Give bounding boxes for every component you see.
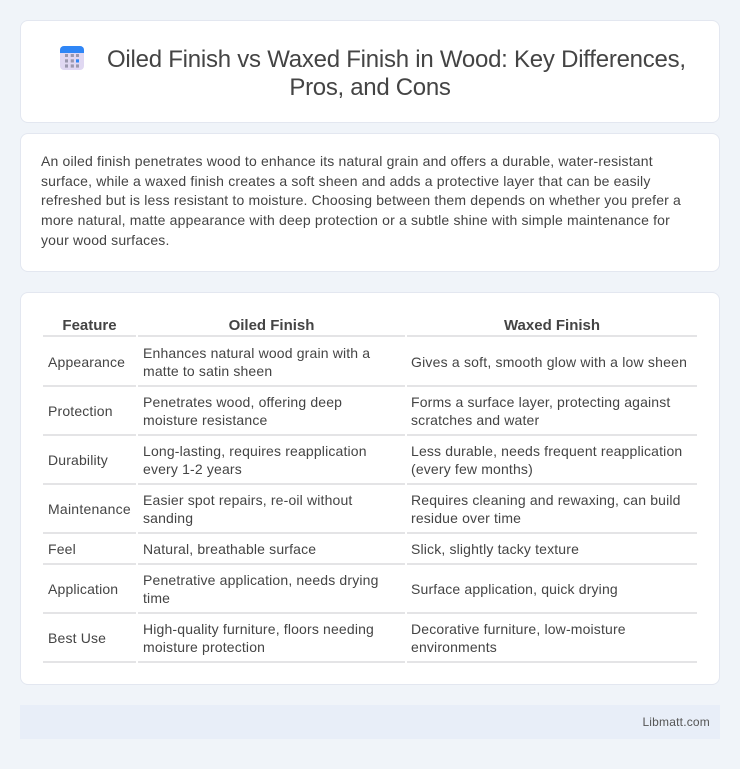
text block: introduction: surface, while a waxed finish creates a soft sheen and adds a protective layer that can be easily	[41, 173, 650, 189]
table header: Feature	[62, 317, 117, 334]
row: protection	[43, 394, 697, 436]
panel: comparison table	[20, 292, 720, 685]
row: protection: Protection	[48, 403, 113, 419]
row: durability: (every few months)	[411, 461, 533, 477]
row: feel: Natural, breathable surface	[143, 541, 316, 557]
row: durability: Less durable, needs frequent reapplication	[411, 443, 682, 459]
row: appearance: Appearance	[48, 354, 125, 370]
row: appearance: matte to satin sheen	[143, 363, 272, 379]
table header	[43, 317, 697, 337]
row: maintenance: Requires cleaning and rewaxing, can build	[411, 492, 681, 508]
row: application: Application	[48, 581, 118, 597]
row: application: Penetrative application, needs drying	[143, 572, 379, 588]
row: best use: Decorative furniture, low-moisture	[411, 621, 626, 637]
row: appearance: Gives a soft, smooth glow with a low sheen	[411, 354, 687, 370]
row: best use: moisture protection	[143, 639, 265, 655]
row: application: Surface application, quick drying	[411, 581, 618, 597]
row: maintenance: residue over time	[411, 510, 521, 526]
row: application	[43, 572, 697, 614]
panel: introduction	[20, 133, 720, 272]
row: appearance	[43, 345, 697, 387]
row: feel	[43, 541, 697, 565]
row: appearance: Enhances natural wood grain with a	[143, 345, 370, 361]
panel: header	[20, 20, 720, 123]
text block: introduction: refreshed but is less resistant to moisture. Choosing between them depends on whether you prefer a	[41, 192, 681, 208]
table header: Oiled Finish	[229, 317, 314, 334]
text block: introduction: more natural, matte appearance with deep protection or a subtle shine with simple maintenance for	[41, 212, 670, 228]
text block: introduction: An oiled finish penetrates wood to enhance its natural grain and offers a durable, water-resistant	[41, 153, 653, 169]
row: protection: moisture resistance	[143, 412, 267, 428]
footer	[20, 705, 720, 739]
table header: Waxed Finish	[504, 317, 600, 334]
row: maintenance: Easier spot repairs, re-oil without	[143, 492, 352, 508]
row: maintenance	[43, 492, 697, 534]
row: durability: every 1-2 years	[143, 461, 242, 477]
row: best use: High-quality furniture, floors needing	[143, 621, 374, 637]
text block: introduction: your wood surfaces.	[41, 232, 170, 248]
title: Pros, and Cons	[289, 74, 451, 101]
row: feel: Feel	[48, 541, 76, 557]
row: feel: Slick, slightly tacky texture	[411, 541, 579, 557]
title	[107, 46, 686, 101]
row: maintenance: sanding	[143, 510, 193, 526]
row: best use: environments	[411, 639, 497, 655]
text block: introduction	[41, 153, 681, 248]
icon: calendar	[60, 46, 84, 70]
row: best use: Best Use	[48, 630, 106, 646]
row: durability: Durability	[48, 452, 108, 468]
row: durability	[43, 443, 697, 485]
row: protection: Forms a surface layer, protecting against	[411, 394, 670, 410]
row: maintenance: Maintenance	[48, 501, 131, 517]
row: application: time	[143, 590, 170, 606]
title: Oiled Finish vs Waxed Finish in Wood: Key Differences,	[107, 46, 686, 73]
row: protection: scratches and water	[411, 412, 539, 428]
row: best use	[43, 621, 697, 663]
row: durability: Long-lasting, requires reapplication	[143, 443, 367, 459]
footer text: Libmatt.com	[642, 715, 710, 729]
row: protection: Penetrates wood, offering deep	[143, 394, 342, 410]
